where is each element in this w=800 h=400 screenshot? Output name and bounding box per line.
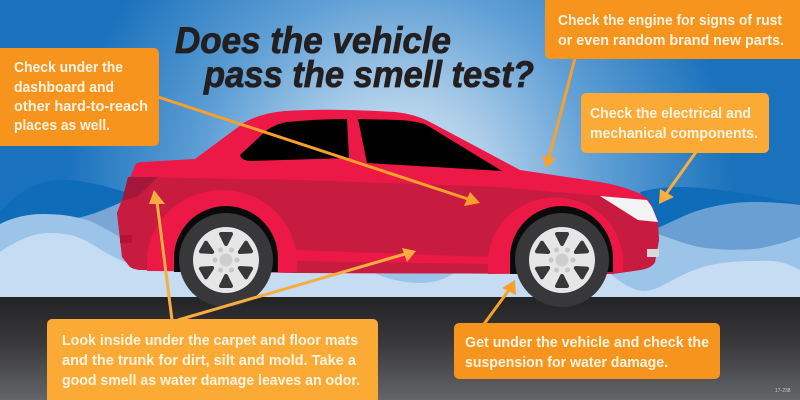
rear marker bbox=[120, 235, 132, 243]
road bbox=[0, 297, 800, 400]
fog light bbox=[647, 249, 659, 257]
arrow: electrical components bbox=[659, 152, 696, 204]
title: pass the smell test? bbox=[203, 54, 534, 95]
callout: electrical: mechanical components. bbox=[590, 126, 758, 142]
car bbox=[117, 110, 659, 307]
arrow: dashboard to car interior bbox=[158, 97, 480, 206]
callout: electrical: Check the electrical and bbox=[590, 106, 751, 122]
title bbox=[175, 20, 534, 95]
arrow: engine bbox=[542, 58, 575, 168]
callout: floor mats: and the trunk for dirt, silt and mold. Take a bbox=[62, 353, 357, 369]
callout: engine: or even random brand new parts. bbox=[558, 33, 784, 49]
callout: suspension bbox=[454, 323, 720, 379]
front side window bbox=[358, 119, 502, 171]
rocker strip bbox=[295, 250, 490, 264]
callout: electrical bbox=[581, 93, 769, 153]
arrow: suspension bbox=[484, 280, 516, 324]
front wheel arch bbox=[488, 198, 623, 274]
callout: floor mats: good smell as water damage leaves an odor. bbox=[62, 373, 360, 389]
callout: dashboard: other hard-to-reach bbox=[14, 99, 148, 115]
front wheel bbox=[515, 213, 609, 307]
callout: suspension: Get under the vehicle and check the bbox=[465, 335, 709, 351]
arch openings bbox=[174, 206, 278, 272]
background sky bbox=[0, 0, 800, 300]
callout: engine: Check the engine for signs of rust bbox=[558, 13, 782, 29]
headlight bbox=[600, 196, 658, 222]
callout: floor mats: Look inside under the carpet and floor mats bbox=[62, 333, 358, 349]
car body bbox=[117, 110, 659, 274]
water waves bbox=[0, 180, 800, 297]
lower body panel bbox=[117, 177, 659, 274]
rear wheel arch bbox=[147, 190, 297, 272]
arrow: floor mats bbox=[178, 248, 416, 320]
callout: floor mats bbox=[47, 319, 378, 400]
arrow: trunk bbox=[149, 190, 172, 320]
callout: dashboard bbox=[0, 48, 159, 146]
callout: dashboard: places as well. bbox=[14, 118, 110, 134]
callout: engine bbox=[545, 0, 800, 59]
rear side window bbox=[240, 119, 349, 161]
callout: dashboard: dashboard and bbox=[14, 80, 114, 96]
callout: dashboard: Check under the bbox=[14, 60, 123, 76]
reference code: 17-238 bbox=[775, 388, 791, 394]
title: Does the vehicle bbox=[175, 20, 451, 61]
rear wheel bbox=[179, 213, 273, 307]
callout: suspension: suspension for water damage. bbox=[465, 355, 668, 371]
taillight bbox=[122, 177, 158, 201]
